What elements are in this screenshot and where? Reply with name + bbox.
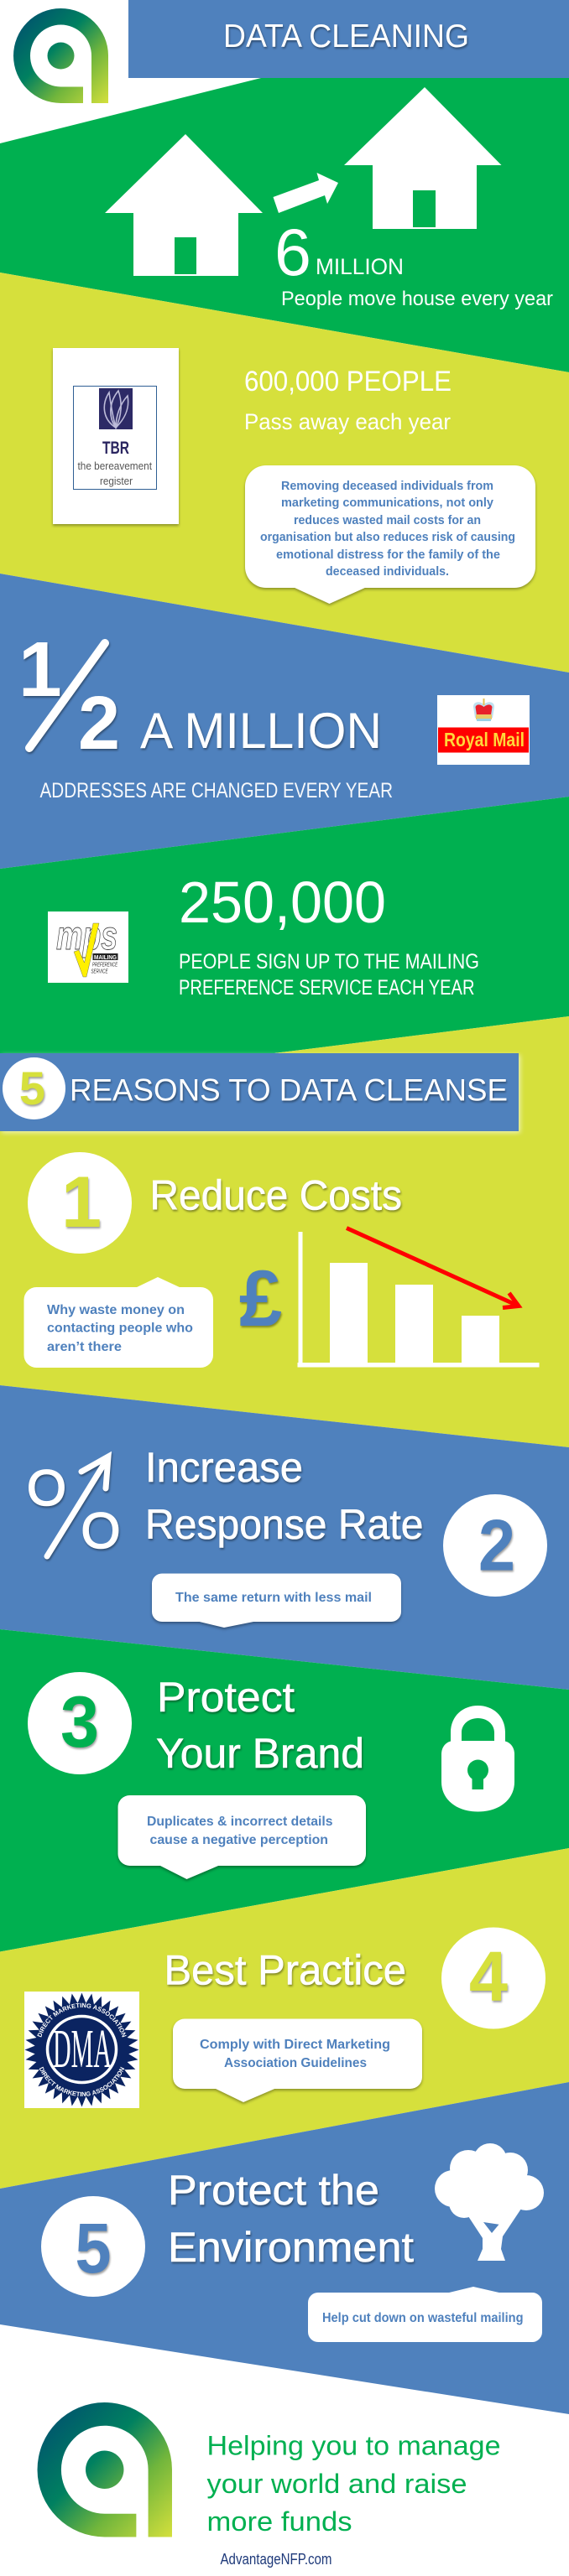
logo: royal mail: Royal Mail — [444, 729, 525, 750]
heading: increase response rate — [145, 1444, 423, 1548]
logo: the bereavement register: the bereavement — [77, 460, 152, 472]
logo: mailing preference service — [48, 911, 128, 983]
callout: removing deceased individuals: Removing deceased individuals from — [281, 479, 493, 493]
callout: duplicates and incorrect details — [117, 1795, 366, 1879]
callout: help cut down — [308, 2287, 542, 2342]
logo: royal mail — [437, 695, 530, 765]
heading: protect your brand: Protect — [157, 1674, 295, 1721]
heading: best practice: Best Practice — [164, 1947, 406, 1994]
callout: removing deceased individuals: deceased individuals. — [326, 564, 449, 579]
heading: reduce costs: Reduce Costs — [149, 1172, 402, 1219]
heading: five reasons to data cleanse — [0, 1053, 519, 1131]
logo: mailing preference service: mps — [56, 914, 117, 958]
statistic: 6 million: MILLION — [316, 254, 404, 279]
callout: why waste money: contacting people who — [47, 1322, 193, 1335]
text: people move house: People move house every year — [281, 288, 553, 310]
number badge: 2 — [443, 1494, 547, 1597]
logo: mailing preference service: MAILING — [94, 955, 117, 961]
logo: direct marketing association — [24, 1992, 139, 2108]
logo: mailing preference service: PREFERENCE — [92, 963, 117, 968]
text: people sign up: PREFERENCE SERVICE EACH YEAR — [179, 976, 475, 1000]
logo: AdvantageNFP top — [13, 8, 108, 103]
icon: pound sign: £ — [239, 1254, 282, 1343]
icon: second house — [344, 87, 502, 229]
callout: help cut down: Help cut down on wasteful mailing — [322, 2311, 524, 2325]
callout: duplicates and incorrect details: Duplicates & incorrect details — [147, 1815, 333, 1829]
panel: bereavement statistic — [0, 273, 569, 673]
logo: the bereavement register: register — [100, 475, 133, 487]
heading: protect your brand — [156, 1674, 364, 1777]
icon: first house — [105, 134, 263, 276]
heading: protect the environment: Environment — [168, 2224, 414, 2271]
callout: duplicates and incorrect details: cause a negative perception — [149, 1833, 328, 1847]
title bar: data cleaning: DATA CLEANING — [223, 18, 469, 55]
heading: 600,000 people: 600,000 PEOPLE — [244, 366, 452, 397]
arrow: moving between houses — [274, 173, 338, 213]
number badge: 1: 1 — [61, 1162, 102, 1243]
text: pass away each year: Pass away each year — [244, 409, 451, 434]
text: people sign up: PEOPLE SIGN UP TO THE MAILING — [179, 950, 479, 974]
callout: removing deceased individuals: reduces wasted mail costs for an — [294, 513, 481, 527]
panel: mailing preference service — [0, 797, 569, 1088]
statistic: 6 million — [274, 215, 404, 289]
number badge: 2: 2 — [478, 1506, 515, 1587]
callout: comply with guidelines: Comply with Direct Marketing — [200, 2038, 390, 2052]
callout: removing deceased individuals: emotional distress for the family of the — [276, 548, 500, 562]
callout: why waste money: Why waste money on — [47, 1303, 185, 1317]
text: addresses changed: ADDRESSES ARE CHANGED EVERY YEAR — [40, 779, 393, 802]
arrow: red downward trend — [347, 1228, 519, 1308]
logo: direct marketing association: DIRECT MARKETING ASSOCIATION — [39, 2066, 124, 2096]
logo: direct marketing association: DMA — [53, 2018, 112, 2080]
number badge: 3: 3 — [60, 1682, 99, 1763]
statistic: 6 million: 6 — [274, 215, 311, 289]
statistic: 250,000: 250,000 — [179, 870, 386, 935]
logo: mailing preference service: SERVICE — [91, 969, 108, 974]
callout: why waste money: aren’t there — [47, 1340, 122, 1354]
icon: percent with upward arrow: O — [27, 1460, 66, 1516]
panel: reason 1 reduce costs — [0, 1016, 569, 1447]
icon: percent with upward arrow: O — [81, 1503, 121, 1559]
icon: percent with upward arrow — [27, 1457, 121, 1559]
heading: increase response rate: Response Rate — [145, 1501, 423, 1548]
callout: removing deceased individuals — [245, 465, 535, 604]
panel: six million movers — [0, 78, 569, 372]
text: people sign up — [179, 950, 479, 1000]
callout: same return: The same return with less mail — [175, 1591, 372, 1605]
number badge: 4: 4 — [469, 1937, 508, 2016]
callout: comply with guidelines — [173, 2019, 422, 2102]
heading: five reasons to data cleanse: REASONS TO DATA CLEANSE — [70, 1073, 508, 1107]
heading: protect the environment — [168, 2167, 414, 2271]
heading: protect your brand: Your Brand — [156, 1730, 364, 1777]
callout: comply with guidelines: Association Guidelines — [224, 2056, 367, 2070]
website url: AdvantageNFP.com — [220, 2551, 332, 2568]
logo: the bereavement register: TBR — [102, 439, 129, 458]
callout: removing deceased individuals: organisation but also reduces risk of causing — [260, 530, 515, 544]
title bar: data cleaning — [128, 0, 569, 78]
callout: same return — [152, 1573, 401, 1628]
statistic: one half a million — [18, 626, 382, 766]
panel: reason 2 response rate — [0, 1385, 569, 1690]
callout: why waste money — [23, 1277, 213, 1368]
panel: reason 5 protect the environment — [0, 2082, 569, 2414]
number badge: 3 — [28, 1672, 132, 1774]
panel: half a million addresses — [0, 574, 569, 869]
logo: direct marketing association: DIRECT MARKETING ASSOCIATION — [37, 2002, 127, 2038]
heading: protect the environment: Protect the — [168, 2167, 379, 2214]
panel: reason 3 protect your brand — [0, 1629, 569, 1952]
panel: reason 4 best practice — [0, 1848, 569, 2189]
tagline: helping you: your world and raise — [206, 2469, 467, 2499]
number badge: 1 — [28, 1152, 132, 1254]
statistic: one half a million: 1 — [18, 626, 62, 713]
icon: padlock — [441, 1706, 514, 1811]
callout: removing deceased individuals: marketing communications, not only — [281, 496, 494, 510]
statistic: one half a million: A MILLION — [140, 703, 382, 759]
number badge: 4 — [441, 1927, 546, 2029]
tagline: helping you: more funds — [206, 2506, 352, 2537]
number badge: 5 — [41, 2196, 145, 2297]
number badge: 5: 5 — [76, 2209, 111, 2288]
icon: tree — [435, 2143, 544, 2261]
logo: AdvantageNFP bottom — [38, 2402, 172, 2537]
logo: the bereavement register — [53, 348, 179, 524]
tagline: helping you: Helping you to manage — [206, 2430, 500, 2460]
heading: five reasons to data cleanse: 5 — [19, 1062, 45, 1114]
heading: increase response rate: Increase — [145, 1444, 303, 1491]
bar chart: falling costs — [297, 1228, 539, 1367]
tagline: helping you — [206, 2430, 500, 2537]
statistic: one half a million: 2 — [78, 682, 120, 766]
